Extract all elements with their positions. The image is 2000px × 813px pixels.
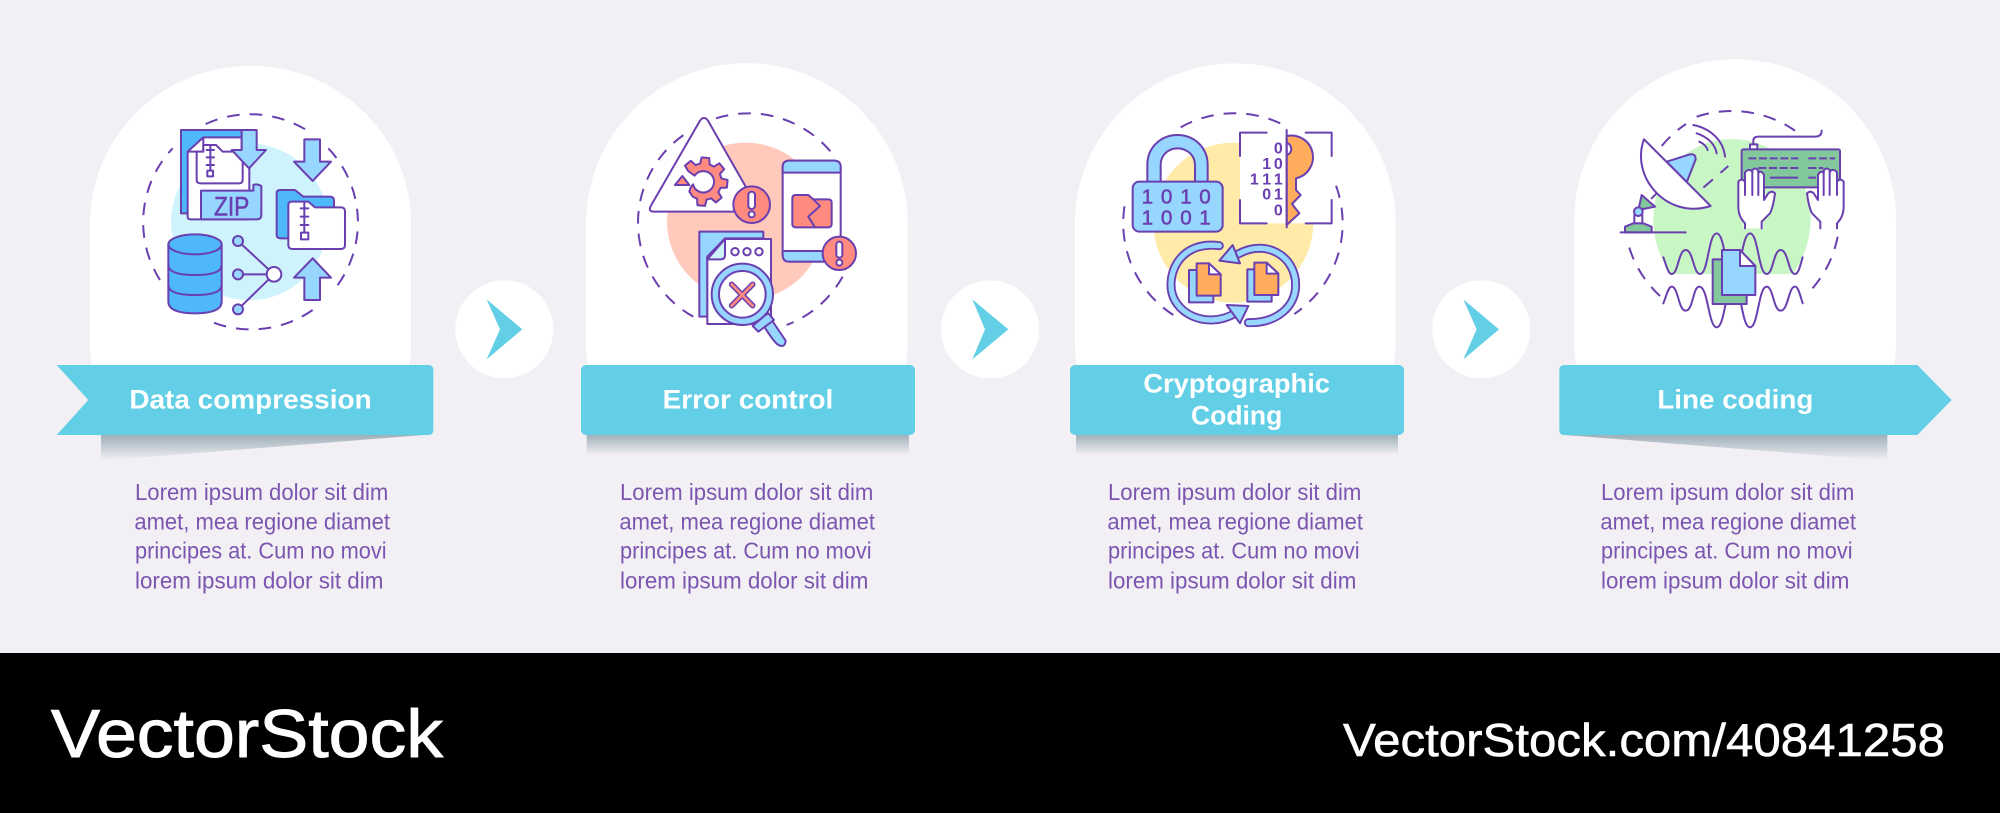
banner	[1070, 365, 1404, 435]
lock digits row two: 1001	[1142, 206, 1211, 229]
banner	[581, 365, 915, 435]
text block	[1600, 479, 1857, 593]
right hand	[1807, 168, 1844, 228]
text block: Lorem ipsum dolor sit dim	[1108, 479, 1361, 505]
text block: principes at. Cum no movi	[135, 538, 387, 564]
panel: error control	[581, 63, 1039, 593]
panel: data compression	[57, 66, 553, 593]
text block: lorem ipsum dolor sit dim	[620, 567, 868, 593]
binary column: 111	[1250, 171, 1283, 188]
banner shadow	[1076, 435, 1398, 455]
heading: Coding	[1191, 400, 1282, 430]
text block: principes at. Cum no movi	[1601, 538, 1853, 564]
text block	[1107, 479, 1364, 593]
icon: error control	[638, 113, 856, 346]
heading: Error control	[663, 384, 833, 414]
text block: principes at. Cum no movi	[1108, 538, 1360, 564]
text block: principes at. Cum no movi	[620, 538, 872, 564]
card	[586, 63, 908, 397]
banner shadow	[101, 435, 423, 461]
text block: lorem ipsum dolor sit dim	[1601, 567, 1849, 593]
card	[90, 66, 411, 397]
heading: Data compression	[129, 384, 372, 414]
footer logo: VectorStock	[51, 696, 444, 772]
arrow	[941, 280, 1039, 378]
panel: line coding	[1559, 59, 1952, 593]
text block: lorem ipsum dolor sit dim	[1108, 567, 1356, 593]
text block: amet, mea regione diamet	[134, 508, 391, 534]
icon: cryptographic coding	[1123, 113, 1343, 323]
banner shadow	[1565, 435, 1887, 461]
zip label: ZIP	[214, 192, 249, 222]
banner: ribbon	[57, 365, 433, 435]
panel: cryptographic coding	[1070, 63, 1530, 593]
arrow	[455, 280, 553, 378]
heading: Cryptographic	[1143, 368, 1330, 398]
gear	[685, 157, 728, 206]
heading	[1143, 368, 1330, 430]
text block: lorem ipsum dolor sit dim	[135, 567, 383, 593]
text block	[134, 479, 391, 593]
card	[1075, 63, 1396, 397]
heading: Line coding	[1657, 384, 1813, 414]
lock digits: 1010	[1142, 185, 1211, 208]
binary column: 0	[1274, 140, 1283, 157]
text block: amet, mea regione diamet	[1600, 508, 1857, 534]
binary column: 10	[1262, 156, 1283, 173]
icon: line coding	[1621, 111, 1844, 327]
text block: Lorem ipsum dolor sit dim	[135, 479, 388, 505]
text block: amet, mea regione diamet	[1107, 508, 1364, 534]
arrow	[1432, 280, 1530, 378]
text block: amet, mea regione diamet	[619, 508, 876, 534]
card	[1574, 59, 1896, 397]
text block: Lorem ipsum dolor sit dim	[1601, 479, 1854, 505]
icon: data compression	[143, 114, 358, 329]
banner: arrow	[1559, 365, 1952, 435]
binary column: 01	[1262, 187, 1283, 204]
binary column	[1250, 140, 1283, 219]
banner shadow	[587, 435, 909, 455]
footer url: VectorStock.com/40841258	[1343, 714, 1945, 766]
text block: Lorem ipsum dolor sit dim	[620, 479, 873, 505]
footer bar	[0, 653, 2000, 813]
binary column: 0	[1274, 202, 1283, 219]
text block	[619, 479, 876, 593]
left hand	[1738, 168, 1775, 228]
